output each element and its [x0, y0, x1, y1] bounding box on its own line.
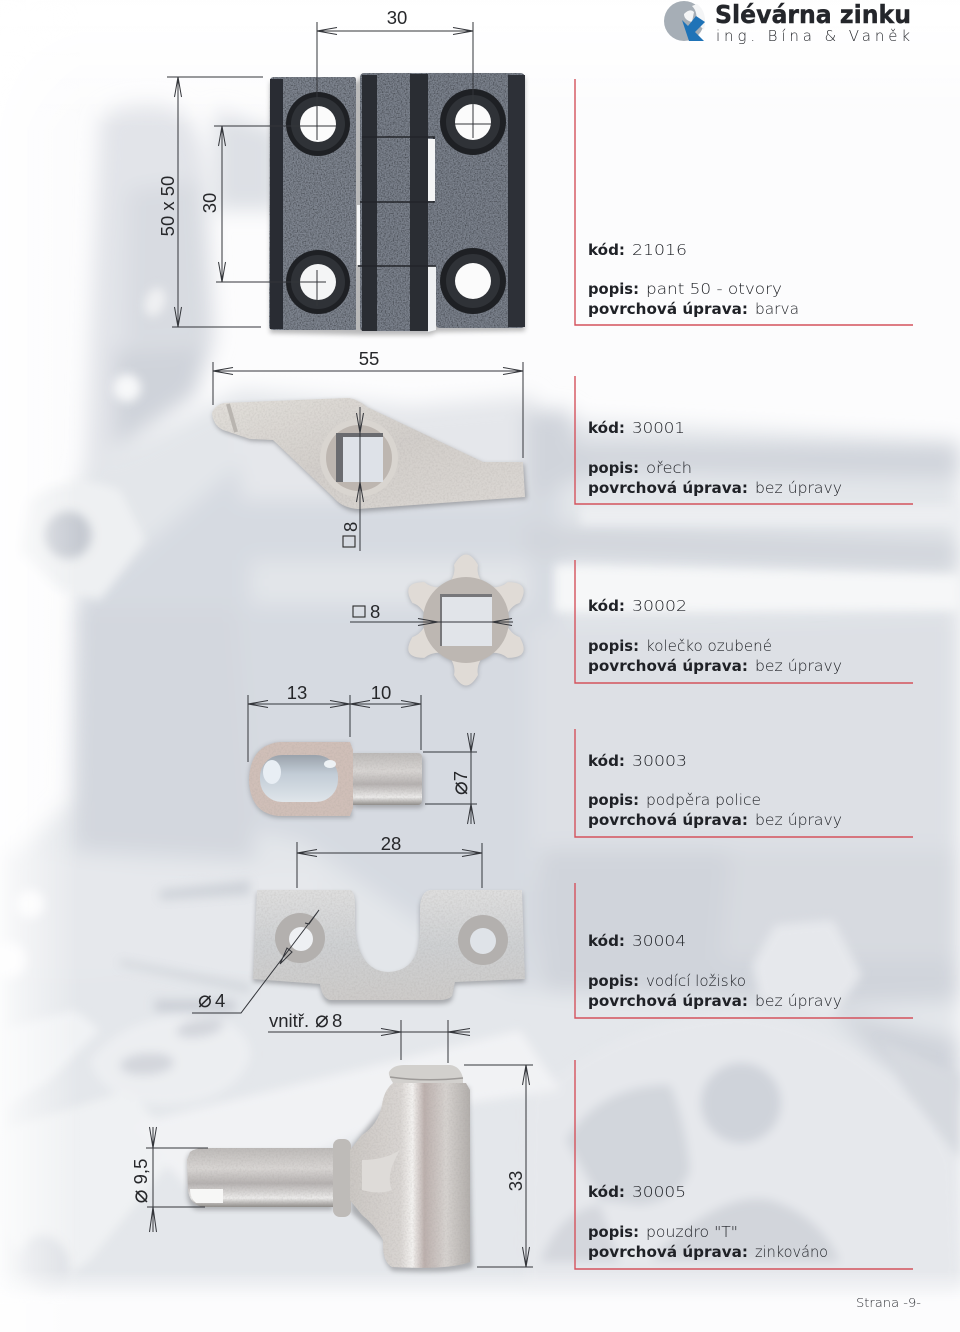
dimension 50 x 50: 50 x 50 — [157, 176, 178, 236]
info panel: 30002 — [575, 560, 913, 683]
dimension 30 vertical — [199, 126, 336, 306]
description 30005 — [588, 1223, 738, 1241]
dimension 50 x 50 — [157, 77, 263, 327]
dimension diameter 4: 4 — [215, 990, 225, 1011]
dimension square 8 horizontal: 8 — [370, 601, 380, 622]
product 21016: hinge with dimensions — [157, 7, 525, 335]
code 30005: 30005 — [632, 1183, 686, 1201]
description 30002 — [588, 637, 772, 655]
code 30004: kód: — [588, 932, 625, 950]
product 30002: toothed wheel with dimensions — [350, 554, 531, 686]
hinge photo — [269, 73, 525, 335]
dimension diameter 4 — [192, 910, 319, 1013]
product 30004: guide bearing plate with dimensions — [192, 833, 525, 1063]
dimension 28 — [297, 833, 482, 888]
finish 30005: povrchová úprava: — [588, 1243, 748, 1261]
product 30003: shelf support with dimensions — [248, 682, 477, 824]
finish 30001 — [588, 479, 842, 497]
dimension inner diameter 8 — [268, 1007, 470, 1063]
info panel: 30004 — [575, 883, 913, 1018]
dimension 33: 33 — [505, 1171, 526, 1191]
T bushing photo — [187, 1065, 473, 1272]
finish 30001: povrchová úprava: — [588, 479, 748, 497]
description 30001: ořech — [646, 459, 692, 477]
dimension square 8 vertical — [340, 407, 364, 551]
dimension inner diameter 8: 8 — [332, 1010, 342, 1031]
finish 30005: zinkováno — [755, 1243, 828, 1261]
product 30005: T bushing with dimensions — [127, 1065, 533, 1272]
description 30004 — [588, 972, 746, 990]
info panel: 21016 — [575, 79, 913, 325]
dimension 55 — [213, 348, 523, 458]
plate holes — [275, 913, 508, 965]
code 30005 — [588, 1183, 686, 1201]
guide plate photo — [253, 890, 525, 1004]
code 30003: 30003 — [632, 752, 687, 770]
finish 30002: bez úpravy — [755, 657, 842, 675]
description 30005: popis: — [588, 1223, 639, 1241]
description 30003: popis: — [588, 791, 639, 809]
code 30003 — [588, 752, 687, 770]
code 30003: kód: — [588, 752, 625, 770]
dimension diameter 9,5: ⌀ 9,5 — [127, 1159, 153, 1203]
finish 30002 — [588, 657, 842, 675]
product 30001: latch with dimensions — [212, 348, 527, 551]
dimension square 8 horizontal — [350, 601, 513, 626]
dimension 10 — [350, 682, 421, 750]
finish 30004 — [588, 992, 842, 1010]
finish 30005 — [588, 1243, 828, 1261]
finish 21016: povrchová úprava: — [588, 300, 748, 318]
description 21016 — [588, 280, 782, 298]
description 30003: podpěra police — [646, 791, 761, 809]
latch photo — [212, 398, 527, 512]
description 30001 — [588, 459, 692, 477]
dimension 13 — [248, 682, 350, 762]
code 30001: 30001 — [632, 419, 685, 437]
info panel: 30001 — [575, 376, 913, 504]
description 30002: popis: — [588, 637, 639, 655]
finish 30001: bez úpravy — [755, 479, 842, 497]
toothed wheel photo — [401, 554, 531, 686]
dimension 28: 28 — [381, 833, 401, 854]
dimension 33 — [464, 1065, 533, 1267]
company logo — [664, 0, 911, 45]
finish 30004: povrchová úprava: — [588, 992, 748, 1010]
dimension 30 vertical: 30 — [199, 193, 220, 213]
dimension 13: 13 — [287, 682, 307, 703]
code 30002 — [588, 597, 687, 615]
description 30003 — [588, 791, 761, 809]
dimension 10: 10 — [371, 682, 391, 703]
logo mark — [664, 1, 705, 41]
dimension 55: 55 — [359, 348, 379, 369]
description 30002: kolečko ozubené — [646, 637, 772, 655]
description 30004: vodící ložisko — [646, 972, 746, 990]
dimension inner diameter 8: vnitř. — [269, 1010, 309, 1031]
dimension square 8 vertical: 8 — [340, 522, 361, 532]
code 30004 — [588, 932, 686, 950]
dimension diameter 4: ⌀ — [198, 987, 212, 1013]
description 30004: popis: — [588, 972, 639, 990]
logo subtitle: ing. Bína & Vaněk — [716, 27, 910, 45]
description 30001: popis: — [588, 459, 639, 477]
code 21016: 21016 — [632, 241, 687, 259]
dimension 30 horizontal — [317, 7, 492, 140]
hinge screw holes — [286, 89, 506, 314]
finish 30003: bez úpravy — [755, 811, 842, 829]
info panel: 30005 — [575, 1060, 913, 1269]
description 30005: pouzdro "T" — [646, 1223, 738, 1241]
dimension inner diameter 8: ⌀ — [315, 1007, 329, 1033]
code 30004: 30004 — [632, 932, 686, 950]
page number: Strana -9- — [856, 1296, 921, 1310]
dimension diameter 7 — [423, 733, 477, 824]
logo name: Slévárna zinku — [715, 0, 911, 29]
finish 30002: povrchová úprava: — [588, 657, 748, 675]
code 30005: kód: — [588, 1183, 625, 1201]
code 30001: kód: — [588, 419, 625, 437]
code 30002: 30002 — [632, 597, 687, 615]
code 21016: kód: — [588, 241, 625, 259]
code 30002: kód: — [588, 597, 625, 615]
info panel: 30003 — [575, 729, 913, 837]
finish 30003: povrchová úprava: — [588, 811, 748, 829]
shelf support photo — [249, 742, 424, 818]
dimension 30 horizontal: 30 — [387, 7, 407, 28]
code 30001 — [588, 419, 685, 437]
description 21016: pant 50 - otvory — [646, 280, 782, 298]
finish 30003 — [588, 811, 842, 829]
code 21016 — [588, 241, 687, 259]
description 21016: popis: — [588, 280, 639, 298]
finish 30004: bez úpravy — [755, 992, 842, 1010]
dimension diameter 7: ⌀7 — [447, 771, 473, 795]
finish 21016: barva — [755, 300, 799, 318]
dimension diameter 9,5 — [127, 1127, 208, 1232]
